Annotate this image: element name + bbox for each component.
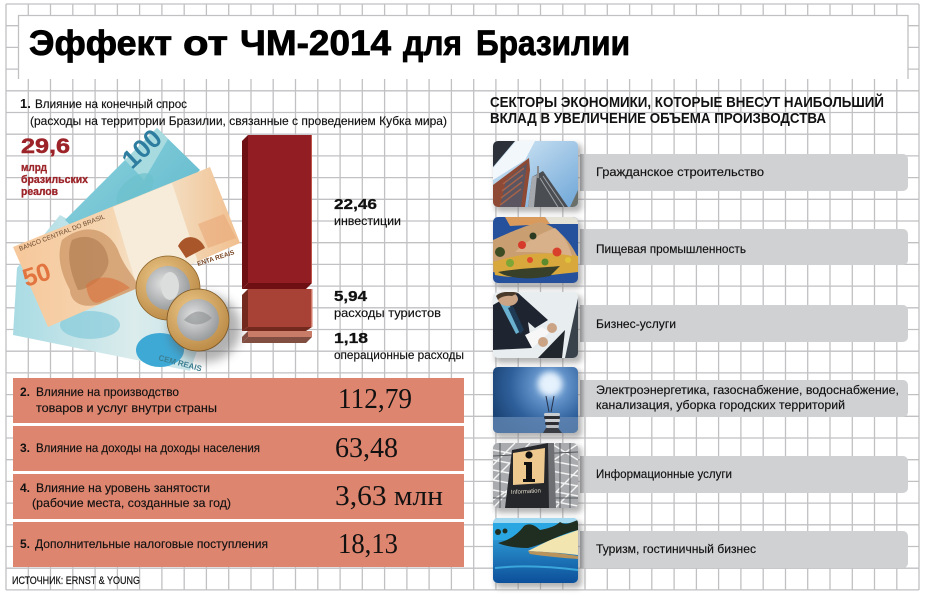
label bar [580,154,908,191]
illustration: banknotes and coins [13,123,241,374]
row 3: income: Влияние на доходы на доходы населения [36,441,260,455]
title: Бразилии [476,24,630,63]
row 2: production: товаров и услуг внутри страны [36,401,217,415]
total amount: реалов [21,186,58,198]
title: ЧМ-2014 [240,24,392,63]
banknote: lower 100 reais [13,215,215,374]
sectors heading [490,93,884,127]
bar label: operating costs: 1,18 [334,330,368,347]
sector: energy and utilities [493,367,908,438]
section 1 heading: Влияние на конечный спрос [35,97,187,111]
row 4: employment: (рабочие места, созданные за год) [32,496,231,510]
row 5: taxes: 18,13 [338,528,398,560]
photo: skyscrapers [493,141,582,212]
sector: food industry [493,217,908,288]
label bar [580,531,908,568]
row 5: taxes: 5. [20,537,30,551]
label bar [580,229,908,265]
stacked 3D bar chart [242,135,312,343]
row 3: income [13,426,464,471]
bar label: investments: инвестиции [334,214,401,228]
photo: information sign [493,443,582,513]
bar label: operating costs: операционные расходы [334,348,464,362]
sectors heading: СЕКТОРЫ ЭКОНОМИКИ, КОТОРЫЕ ВНЕСУТ НАИБОЛЬШИЙ [490,93,884,111]
banknote: 50 reais: ENTA REAIS [196,249,236,268]
sector: construction [493,141,908,212]
banknote: 50 reais: BANCO CENTRAL DO BRASIL [18,213,107,253]
section 1 heading: (расходы на территории Бразилии, связанные с проведением Кубка мира) [30,114,447,128]
sectors heading: ВКЛАД В УВЕЛИЧЕНИЕ ОБЪЕМА ПРОИЗВОДСТВА [490,110,826,127]
photo: light bulb [493,367,582,438]
title panel [18,16,908,79]
row 4: employment: Влияние на уровень занятости [36,481,210,495]
title: Эффект [29,24,172,63]
bar label: operating costs [334,330,464,362]
bar label: investments: 22,46 [334,196,377,213]
sector: information services [493,443,908,513]
row 5: taxes: Дополнительные налоговые поступления [35,537,268,551]
row 4: employment: 3,63 млн [335,480,443,512]
total amount: млрд [21,162,47,174]
banknote: 50 reais: 50 [19,257,54,293]
row 2: production [13,378,464,423]
label bar [580,380,908,417]
section 1 heading [20,96,447,128]
banknote: upper 100 reais: 100 [116,123,168,174]
row 3: income: 63,48 [335,432,398,464]
photo: man with laptop [493,292,582,363]
bar label: tourists: 5,94 [334,288,368,305]
row 2: production: 2. [20,385,30,399]
row 3: income: 3. [20,441,30,455]
bar segment: investments [242,135,312,289]
photo: tropical beach [493,518,582,588]
sector: tourism and hotels [493,518,908,588]
row 5: taxes [13,522,464,567]
label bar: Гражданское строительство [596,165,764,179]
title: для [403,24,462,63]
banknote: upper 100 reais [65,123,200,260]
source note: ИСТОЧНИК: ERNST & YOUNG [12,575,140,587]
banknote: lower 100 reais: CEM REAIS [157,353,203,374]
photo: food plate [493,217,582,288]
section 1 heading: 1. [20,96,31,111]
label bar [580,305,908,342]
bar segment: tourists [242,289,312,331]
bar label: investments [334,196,401,228]
bar segment: operating costs [242,331,312,343]
label bar: Бизнес-услуги [596,317,676,331]
label bar: Электроэнергетика, газоснабжение, водоснабжение, [596,383,899,397]
bar label: tourists [334,288,441,320]
bar label: tourists: расходы туристов [334,306,441,320]
label bar [580,456,908,493]
label bar: Туризм, гостиничный бизнес [596,542,756,556]
coins [136,256,241,362]
row 4: employment [13,474,464,519]
total amount: 29,6 [21,135,70,158]
banknote: 50 reais [13,167,240,327]
photo: information sign: Information [511,488,541,496]
label bar: Пищевая промышленность [596,242,746,256]
title: от [183,24,228,63]
sector: business services [493,292,908,363]
title [29,24,630,63]
label bar: Информационные услуги [596,467,732,481]
total amount: бразильских [21,174,89,186]
row 2: production: Влияние на производство [36,385,179,399]
total amount [21,135,89,198]
panel: impact rows [13,378,464,567]
row 4: employment: 4. [20,481,30,495]
label bar: канализация, уборка городских территорий [596,398,845,412]
row 2: production: 112,79 [338,383,412,415]
